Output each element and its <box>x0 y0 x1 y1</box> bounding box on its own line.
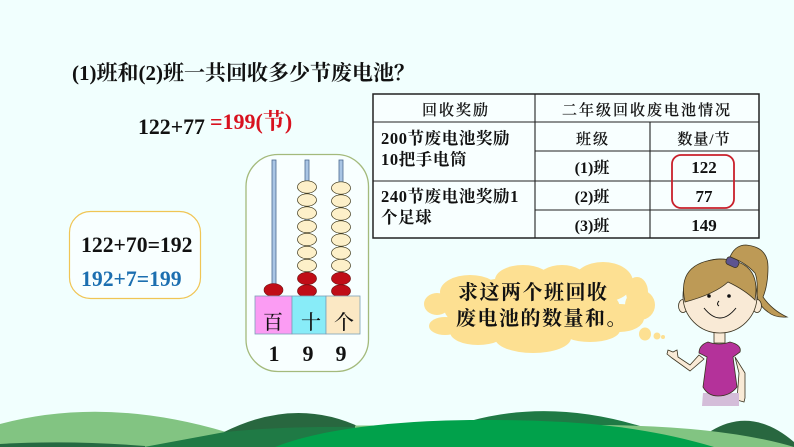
place labels: 百 <box>263 311 283 334</box>
reward text: 个足球 <box>381 208 432 227</box>
class rows: 122 <box>691 158 717 177</box>
place labels <box>263 311 354 334</box>
speech cloud <box>424 262 665 353</box>
neck and arms <box>714 330 725 343</box>
hills <box>0 411 794 447</box>
eyes <box>707 294 711 298</box>
place value: tens <box>292 296 326 334</box>
equation: 122+77: 122+77 <box>138 115 205 139</box>
panel: abacus <box>246 154 368 372</box>
cloud text: 求这两个班回收 <box>458 281 608 304</box>
abacus digits: 1 <box>268 341 280 366</box>
table headers: 数量/节 <box>677 130 731 148</box>
place value: hundreds <box>255 296 292 334</box>
hair <box>683 259 756 302</box>
abacus digits: 9 <box>336 341 346 366</box>
cloud text <box>456 281 628 330</box>
answer: =199: =199(节) <box>210 109 292 134</box>
class rows: (3)班 <box>575 217 609 235</box>
data table <box>373 94 759 238</box>
table headers: 班级 <box>576 131 610 148</box>
ponytail <box>730 245 787 317</box>
red highlight box <box>672 155 734 208</box>
reward text: 240节废电池奖励1 <box>381 186 519 206</box>
place labels: 个 <box>334 311 354 334</box>
class rows <box>575 158 717 235</box>
reward text <box>381 128 519 227</box>
reward text: 10把手电筒 <box>381 149 467 169</box>
step two: 192+7=199 <box>81 267 182 291</box>
table headers <box>422 101 732 148</box>
place value: ones <box>326 296 360 334</box>
reward text: 200节废电池奖励 <box>381 128 510 148</box>
ones beads <box>332 182 350 297</box>
tens beads <box>298 181 316 297</box>
panel: calculation steps <box>70 212 200 298</box>
nose and smile <box>704 301 736 318</box>
table headers: 回收奖励 <box>422 102 490 119</box>
class rows: 77 <box>696 187 713 206</box>
class rows: (1)班 <box>575 159 609 177</box>
abacus digits: 9 <box>302 341 314 366</box>
hair band <box>725 256 740 269</box>
table headers: 二年级回收废电池情况 <box>562 101 732 119</box>
step one: 122+70=192 <box>81 233 192 257</box>
ears <box>678 300 688 312</box>
title: question: (1)班和(2)班一共回收多少节废电池？ <box>72 61 415 85</box>
abacus digits <box>268 341 346 366</box>
hundreds bead <box>264 284 283 296</box>
character: girl <box>667 245 787 406</box>
class rows: (2)班 <box>575 188 609 206</box>
skirt <box>702 393 739 406</box>
cloud text: 废电池的数量和。 <box>456 306 628 330</box>
abacus rods <box>272 160 343 285</box>
shirt <box>699 342 740 396</box>
class rows: 149 <box>691 216 717 235</box>
face <box>683 259 757 333</box>
place labels: 十 <box>301 311 321 334</box>
